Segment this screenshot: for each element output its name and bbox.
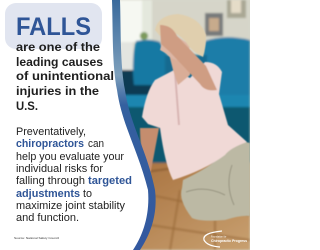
- intro statement: injuries in the: [16, 84, 99, 98]
- body paragraph: to: [83, 188, 92, 200]
- intro statement: leading causes: [16, 55, 103, 69]
- logo: Foundation for Chiropractic Progress: [204, 231, 248, 247]
- heading: FALLS: FALLS: [16, 13, 91, 41]
- body paragraph: help you evaluate your: [16, 151, 124, 163]
- body paragraph: and function.: [16, 212, 79, 224]
- trousers: [181, 142, 250, 221]
- body paragraph: falling through: [16, 175, 85, 187]
- photo: woman seated on floor after a fall: [100, 0, 250, 250]
- arm down: [140, 128, 159, 176]
- body paragraph: Preventatively,: [16, 126, 86, 138]
- body paragraph: chiropractors: [16, 138, 84, 150]
- body paragraph: maximize joint stability: [16, 200, 125, 212]
- intro statement: U.S.: [16, 99, 38, 113]
- intro statement: [16, 40, 114, 113]
- body paragraph: can: [88, 138, 104, 150]
- hair: [155, 14, 206, 57]
- raised forearm: [160, 25, 217, 90]
- white text panel with curved blue edge: [0, 0, 156, 250]
- intro statement: of unintentional: [16, 69, 114, 83]
- intro statement: are one of the: [16, 40, 100, 54]
- source note: Source: National Safety Council: [14, 236, 59, 240]
- shirt: [142, 62, 247, 180]
- FALLS highlight box: [5, 3, 102, 49]
- logo: Foundation for Chiropractic Progress: Foundation for: [211, 236, 227, 238]
- body paragraph: targeted: [88, 175, 132, 187]
- body paragraph: [16, 126, 132, 224]
- body paragraph: adjustments: [16, 188, 80, 200]
- body paragraph: individual risks for: [16, 163, 103, 175]
- neck and face: [168, 50, 190, 85]
